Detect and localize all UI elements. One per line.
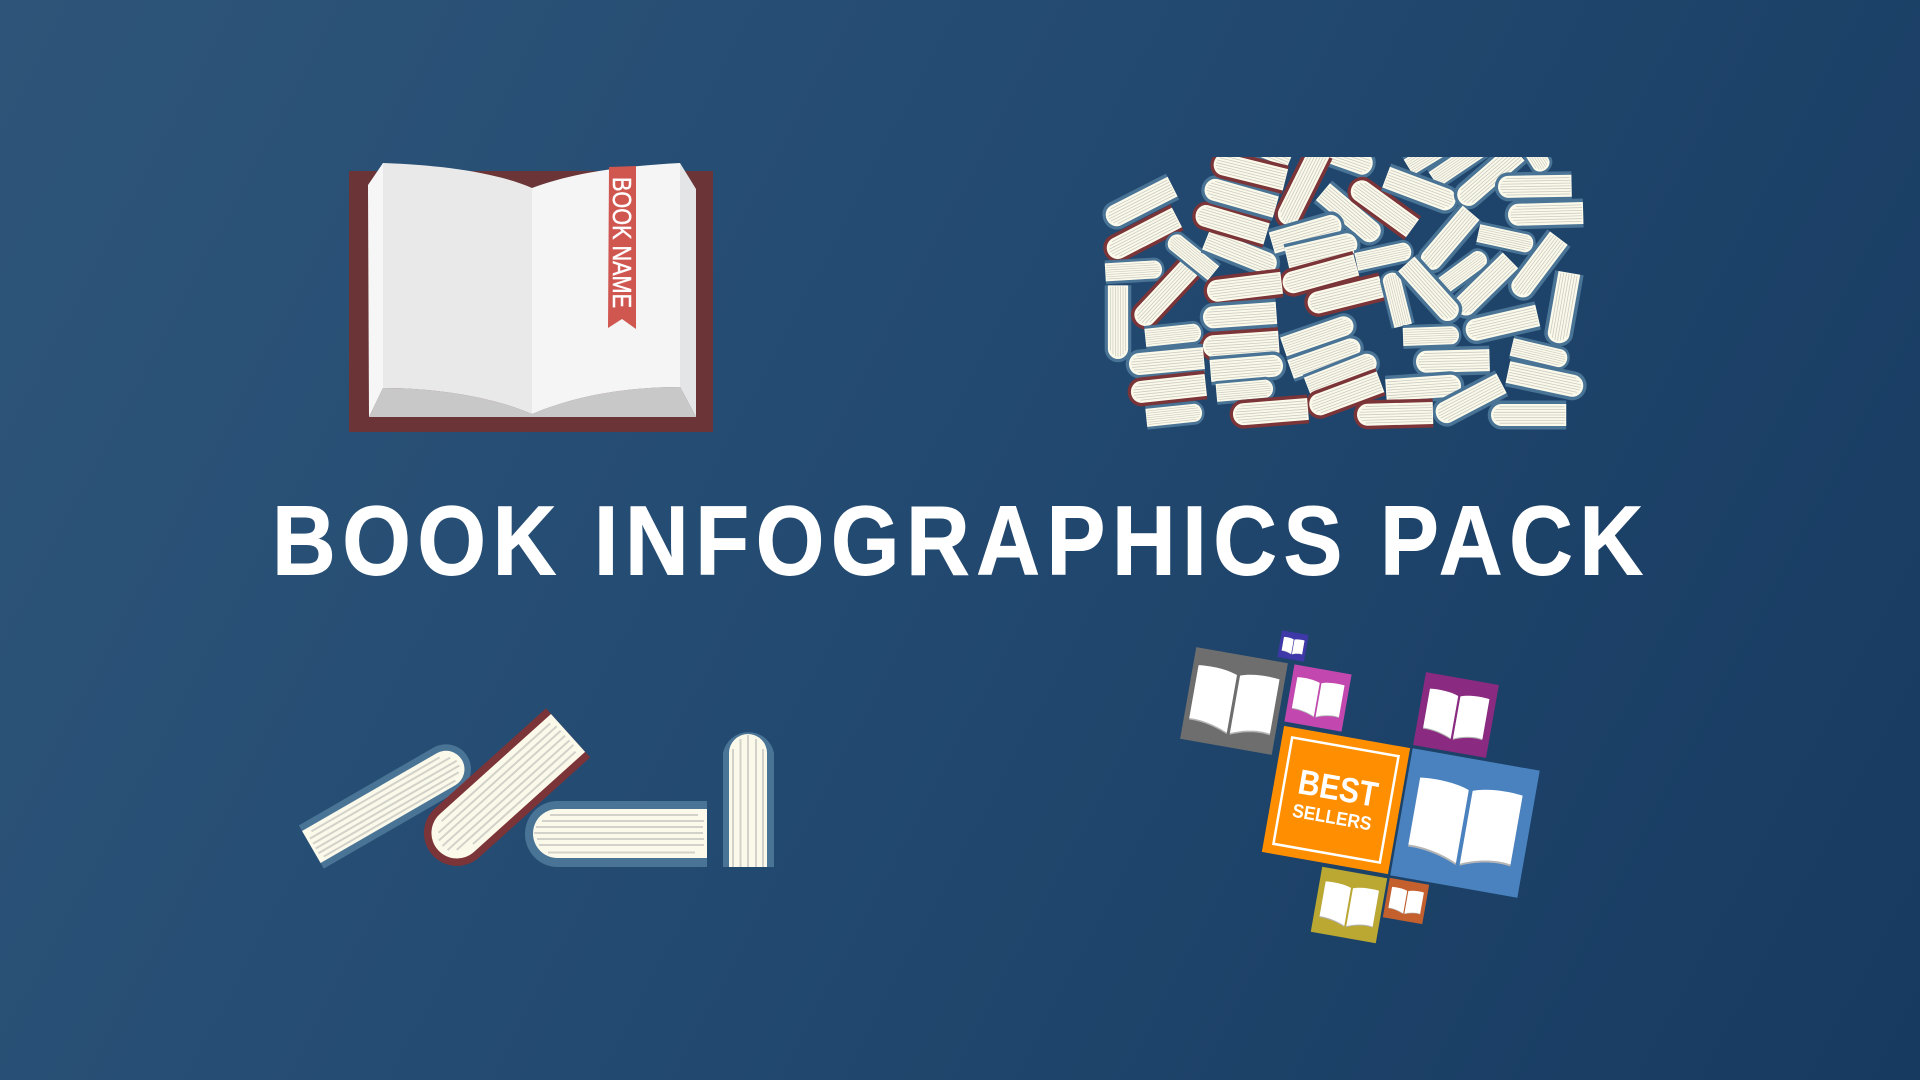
illustration: four leaning books — [299, 708, 774, 880]
tile: indigo — [1277, 630, 1309, 662]
illustration: best sellers tile cluster — [1180, 630, 1540, 943]
book: maroon leaning right — [410, 708, 590, 880]
title: BOOK INFOGRAPHICS PACK — [272, 486, 1650, 596]
book: blue leaning left — [299, 735, 480, 869]
tile: gray — [1180, 647, 1288, 755]
text: SELLERS: SELLERS — [1291, 801, 1373, 835]
right page edge — [680, 163, 696, 417]
text: BEST: BEST — [1295, 763, 1381, 815]
left page — [383, 163, 532, 414]
book: blue lying flat — [525, 801, 707, 867]
left page edge — [368, 163, 383, 417]
illustration: scattered pile of books — [1102, 157, 1587, 430]
book cover — [349, 171, 713, 432]
tile: blue — [1390, 748, 1540, 898]
tile: purple — [1413, 672, 1499, 758]
right page — [532, 163, 680, 414]
bottom page shadow — [369, 387, 696, 417]
book: blue standing upright — [723, 732, 774, 867]
bookmark ribbon — [608, 166, 636, 329]
illustration: open book with bookmark — [349, 163, 713, 432]
bookmark label: BOOK NAME — [607, 177, 637, 308]
tile: rust — [1383, 878, 1429, 924]
tile: magenta — [1284, 664, 1352, 732]
tile: olive — [1311, 867, 1387, 943]
tile: orange best sellers — [1262, 726, 1410, 874]
